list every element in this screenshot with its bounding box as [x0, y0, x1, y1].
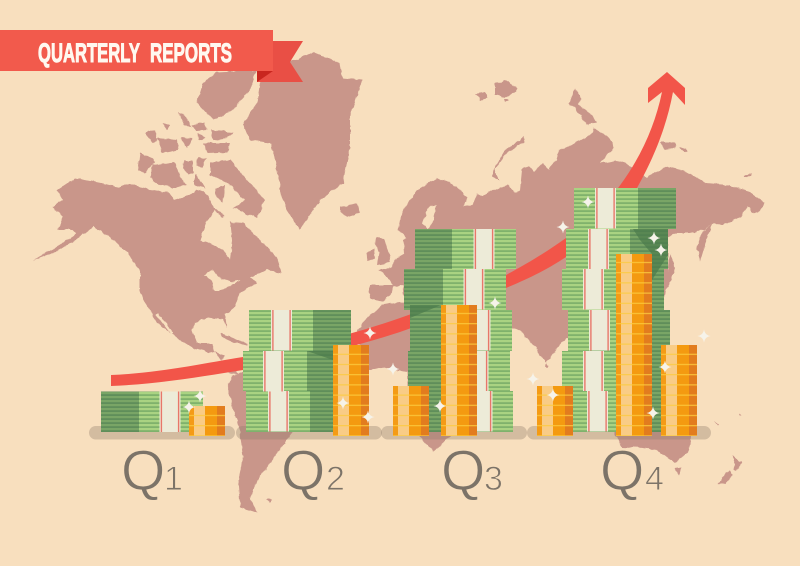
growth arrow: [111, 72, 685, 386]
Q4 right coins: [661, 345, 697, 436]
Q3 column: [393, 229, 516, 436]
map water cut-outs: [156, 205, 436, 334]
label Q4: Q: [600, 439, 644, 503]
Q1 money: [101, 392, 203, 432]
Q1 coins: [189, 406, 225, 436]
South America: [227, 372, 310, 512]
Q3 left coins: [393, 386, 429, 436]
label Q3: Q: [441, 439, 485, 503]
Q2 column: [243, 310, 369, 436]
label Q2: Q: [281, 439, 325, 503]
Svalbard: [569, 88, 597, 125]
shelf Q1: [89, 426, 235, 440]
Australia: [615, 426, 692, 463]
Pacific islets: [714, 414, 742, 425]
title text: QUARTERLY: [38, 38, 140, 68]
Africa: [358, 302, 500, 452]
Cuba and Caribbean: [220, 333, 248, 346]
label Q4: 4: [645, 460, 664, 498]
Hudson Bay: [200, 210, 232, 260]
North America: [33, 178, 282, 374]
Q2 coins: [333, 345, 369, 436]
world map: [33, 52, 765, 512]
New Siberian Islands: [660, 142, 687, 152]
Baltic Sea: [422, 205, 436, 229]
sparkles: [182, 196, 710, 424]
Tasmania: [675, 468, 682, 475]
Eurasia: [368, 128, 765, 363]
label Q3: 3: [484, 460, 503, 498]
UK: [375, 237, 390, 265]
Iceland: [340, 203, 360, 217]
Great Lakes: [204, 270, 240, 290]
Q4 column: [537, 188, 697, 436]
Q3 centre coins: [441, 305, 477, 436]
Japan: [666, 253, 675, 290]
Wrangel Island: [743, 174, 751, 177]
Q2 money: [243, 310, 351, 432]
shelf Q3: [381, 426, 527, 440]
Franz Josef Land: [475, 80, 517, 102]
title text: REPORTS: [150, 38, 232, 68]
title banner: [0, 30, 303, 82]
shelf Q4: [527, 426, 711, 440]
New Zealand: [718, 455, 742, 484]
Arctic islands: [138, 70, 265, 218]
ribbon tail: [257, 41, 303, 82]
quarter labels: [121, 439, 664, 503]
shelf Q2: [236, 426, 382, 440]
label Q1: 1: [164, 460, 183, 498]
Q4 centre coins: [616, 254, 652, 436]
Kamchatka: [697, 223, 713, 262]
Falkland: [266, 499, 272, 503]
Baja strip: [156, 313, 173, 334]
Q4 money: [562, 188, 676, 432]
Q1 column: [101, 392, 225, 436]
Novaya Zemlya: [492, 135, 524, 181]
label Q1: Q: [121, 439, 165, 503]
label Q2: 2: [326, 460, 345, 498]
ribbon: [0, 30, 273, 71]
Q4 left coins: [537, 386, 573, 436]
ribbon fold: [257, 71, 273, 82]
Sri Lanka: [546, 363, 549, 368]
Greenland: [243, 52, 362, 230]
Q3 money: [404, 229, 516, 432]
shelves: [89, 426, 711, 440]
Ireland: [367, 249, 375, 261]
